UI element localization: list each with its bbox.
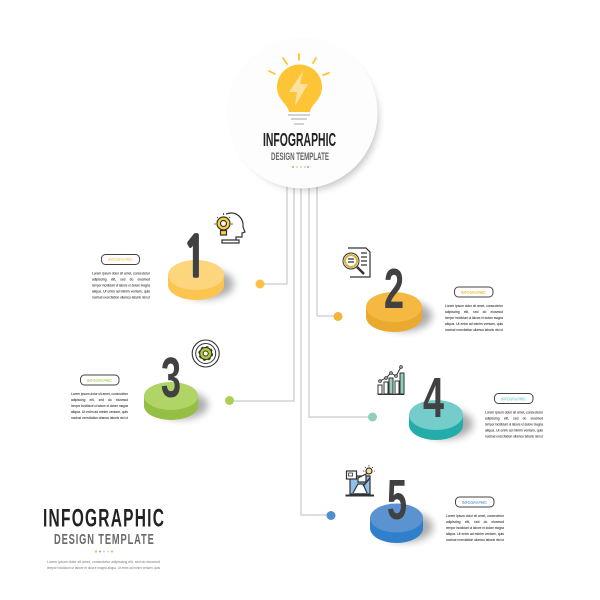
text block 4: tempor incididunt ut labore et dolore magna — [485, 422, 544, 426]
text block 3: Lorem ipsum dolor sit amet, consectetur — [71, 391, 129, 396]
center subtitle: DESIGN TEMPLATE — [271, 151, 329, 163]
text block 5: nostrud exercitation ullamco laboris nisi ut — [446, 537, 505, 542]
label pill 1 — [102, 254, 140, 264]
central circle panel — [226, 38, 378, 190]
subtitle: DESIGN TEMPLATE — [54, 531, 154, 548]
text block 4: nostrud exercitation ullamco laboris nisi ut — [485, 434, 544, 438]
icon: document with magnifier — [343, 248, 370, 277]
text block 1 — [92, 270, 151, 300]
icon: gear in rings — [192, 340, 219, 367]
text block 3: nostrud exercitation ullamco laboris nisi ut — [71, 415, 129, 420]
connector dot 3 — [225, 396, 234, 405]
connector lines — [231, 180, 372, 515]
step 1 — [92, 213, 264, 300]
number 2: 2 — [384, 257, 404, 321]
text block 3 — [71, 391, 129, 420]
text block 4: adipiscing elit, sed do eiusmod — [485, 416, 543, 420]
connector dot 1 — [256, 280, 264, 288]
icon: head with bulb — [214, 213, 245, 243]
connector dot 2 — [334, 312, 342, 321]
icon: light bulb — [269, 54, 329, 124]
text block 1: tempor incididunt ut labore et dolore magna — [92, 282, 151, 288]
text block 1: nostrud exercitation ullamco laboris nisi ut — [92, 294, 151, 300]
text block 5: tempor incididunt ut labore et dolore magna — [446, 525, 505, 530]
text block 3: tempor incididunt ut labore et dolore magna — [71, 403, 129, 408]
text block 1: aliqua. Ut enim ad minim veniam, quis — [92, 288, 150, 294]
text block 5: aliqua. Ut enim ad minim veniam, quis — [446, 531, 504, 536]
text block 4 — [485, 410, 544, 438]
text block 3: aliqua. Ut enim ad minim veniam, quis — [71, 409, 128, 414]
text block 4: Lorem ipsum dolor sit amet, consectetur — [485, 410, 544, 414]
text block 1: adipiscing elit, sed do eiusmod — [92, 276, 150, 282]
text block 2: nostrud exercitation ullamco laboris nisi ut — [445, 327, 504, 332]
label pill 4: INFOGRAPHIC — [501, 396, 526, 402]
step 3 — [71, 340, 234, 420]
disc 1 — [168, 260, 234, 300]
text block 5 — [446, 513, 505, 542]
number 5: 5 — [387, 468, 407, 532]
text block 2: aliqua. Ut enim ad minim veniam, quis — [445, 321, 503, 326]
label pill 5 — [456, 497, 494, 507]
description — [47, 559, 160, 570]
label pill 3 — [80, 375, 119, 385]
disc 4 — [409, 400, 473, 440]
label pill 2 — [454, 287, 493, 297]
connector dot 4 — [368, 412, 377, 422]
label pill 3: INFOGRAPHIC — [87, 378, 112, 384]
bottom-left heading block — [43, 505, 164, 570]
color dots — [95, 550, 113, 553]
text block 3: adipiscing elit, sed do eiusmod — [71, 397, 128, 402]
step 5 — [326, 465, 505, 543]
label pill 4 — [494, 394, 533, 404]
center color dots — [292, 166, 309, 168]
label pill 1: INFOGRAPHIC — [108, 257, 133, 263]
label pill 2: INFOGRAPHIC — [461, 290, 486, 296]
text block 2: Lorem ipsum dolor sit amet, consectetur — [445, 303, 504, 308]
step 4 — [368, 366, 544, 440]
text block 5: adipiscing elit, sed do eiusmod — [446, 519, 504, 524]
description: tempor incididunt ut labore et dolore magna aliqua. Ut enim ad minim veniam, quis — [47, 565, 160, 570]
center title: INFOGRAPHIC — [263, 130, 336, 150]
text block 2: adipiscing elit, sed do eiusmod — [445, 309, 503, 314]
label pill 5: INFOGRAPHIC — [462, 500, 487, 506]
disc 5 — [370, 504, 433, 543]
disc 3 — [144, 382, 208, 420]
text block 1: Lorem ipsum dolor sit amet, consectetur — [92, 270, 151, 276]
text block 4: aliqua. Ut enim ad minim veniam, quis — [485, 428, 543, 432]
icon: bar chart with trend — [378, 366, 404, 394]
text block 2 — [445, 303, 504, 332]
number 1: 1 — [183, 232, 207, 286]
step 2 — [334, 248, 504, 332]
icon: laptop presentation — [346, 465, 375, 496]
connector dot 5 — [326, 511, 336, 520]
description: Lorem ipsum dolor sit amet, consectetur adipiscing elit, sed do eiusmod — [47, 559, 160, 564]
number 3: 3 — [161, 346, 181, 410]
text block 5: Lorem ipsum dolor sit amet, consectetur — [446, 513, 505, 518]
main title: INFOGRAPHIC — [43, 505, 164, 533]
text block 2: tempor incididunt ut labore et dolore magna — [445, 315, 504, 320]
number 4: 4 — [423, 366, 444, 430]
disc 2 — [366, 292, 432, 332]
